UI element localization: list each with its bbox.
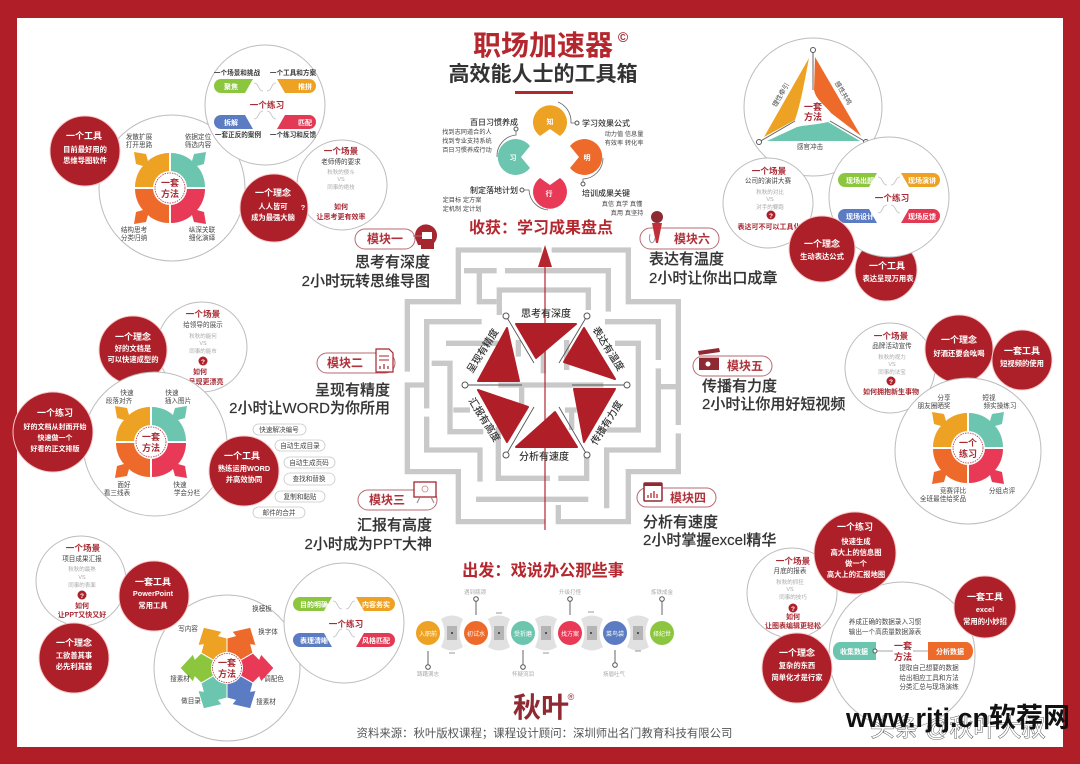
text: 培训成果关键: 培训成果关键 [582,188,630,198]
method circle 2: 段落对齐 [106,396,133,405]
exercise circle 5 [895,378,1041,524]
icon: 行 pacman: 行 [546,189,552,198]
scene circle 2: 呈现更漂亮 [188,377,224,386]
panel: journey chain [416,588,674,678]
method circle 4: 给出相应工具和方法 [899,673,959,682]
method circle 3 [154,595,300,741]
method circle 4: 方法 [894,651,912,662]
icon: document [376,349,393,372]
method circle 1: 依据定位 [185,132,212,141]
method circle 2: 快速 [120,388,134,397]
text: 培训成果关键: 真用 真坚持 [611,209,643,217]
chart: six module triangles [462,307,630,463]
stage nodes: 初试水 [467,630,485,638]
exercise circle 5: 全班最佳给奖品 [920,494,966,503]
scene circle 4: VS [786,587,794,593]
scene circle 4: 一个场景 [776,555,811,566]
concept bubble 5: 好酒还要会吆喝 [933,349,985,358]
method circle 3: 换模板 [252,604,272,613]
scene circle 2 [157,302,247,392]
exercise circle 5: 分组点评 [989,486,1016,495]
method circle 6: 感性共鸣 [833,79,854,107]
method circle 4: 输出一个高质量数据源表 [849,627,922,636]
module 3 heading [304,482,437,553]
method circle 3: 一套 [218,657,236,668]
tool bubble 2: 并高效协同 [226,475,262,484]
method circle 4: 提取自己想要的数据 [899,663,959,672]
concept bubble 1: ? [301,203,306,212]
scene circle 3: 项目成果汇报 [62,554,102,563]
labels: 传播有力度 [588,398,625,447]
panel: module 1 tools [50,45,387,261]
method circle 2: 方法 [142,442,160,453]
exercise circle 6 [829,137,949,257]
scene circle 6: 公司的演讲大赛 [745,176,791,185]
exercise circle 6: 现场设计 [846,212,874,221]
scene circle 4: 如何 [786,612,800,621]
module 6 heading: 2小时让你出口成章 [649,269,777,287]
tool bubble 2: 一个工具 [224,451,260,461]
text: 制定落地计划: 定目标 定方案 [443,196,482,204]
tool bubble 2: 熟练运用WORD [218,464,270,473]
module 4 heading: 模块四 [670,490,706,505]
scene circle 6: ? [769,213,773,220]
stage nodes: 入职前 [419,630,437,638]
scene circle 2: VS [199,341,207,347]
concept bubble 3 [39,623,109,693]
stage callouts: 踌躇满志 [417,670,439,678]
stage nodes: 菜鸟袋 [606,630,624,638]
exercise circle 1: 一个练习 [250,99,284,110]
scene circle 3: VS [78,575,86,581]
heading: departure: 出发：戏说办公那些事 [462,561,624,580]
scene circle 4: 同事的技巧 [779,593,807,601]
WORD skill pills: 快速解决编号 [259,425,299,434]
method circle 6: 一套 [804,101,822,112]
title: © [618,29,629,45]
scene circle 6: 秋秋的对比 [756,188,784,196]
exercise circle 6: 一个练习 [875,192,909,203]
exercise bubble 2: 好看的正文排版 [30,444,80,453]
module 4 heading: 2小时掌握excel精华 [643,532,776,549]
exercise circle 3: 一个练习 [329,618,363,629]
icon: 习 pacman: 习 [510,154,516,162]
text: 培训成果关键: 真信 真学 真懂 [602,200,642,208]
exercise bubble 2: 好的文档从封面开始 [24,422,86,431]
WORD skill pills: 查找和替换 [293,474,326,483]
title: 高效能人士的工具箱 [448,62,638,86]
method circle 1 [99,115,245,261]
exercise circle 1: 一个练习和反馈 [270,130,316,139]
method circle 1: 结构思考 [121,225,148,234]
tool bubble 5: 一套工具 [1004,345,1040,356]
exercise circle 6: 现场出题 [846,176,874,185]
module 2 heading [229,349,395,417]
icon: 明 pacman [570,139,602,175]
tool bubble 1: 思维导图软件 [63,156,108,165]
tool bubble 5 [992,330,1052,390]
exercise circle 5: 频实操练习 [984,401,1016,410]
scene circle 4: ? [791,606,795,613]
scene circle 3: 秋秋的最熟 [68,565,96,573]
source line: 资料来源：秋叶版权课程；课程设计顾问：深圳师出名门教育科技有限公司 [357,726,732,740]
concept bubble 4: 简单化才是行家 [771,673,823,682]
icon: 行 pacman [533,178,567,209]
icon: 知 pacman: 知 [546,117,554,126]
stage callouts: 炼铁成金 [651,588,673,596]
title: 职场加速器 [473,30,613,61]
panel: module 5 tools [845,315,1052,524]
scene circle 3: 如何 [75,601,89,610]
exercise circle 5: 练习 [959,448,977,459]
scene circle 6 [723,158,813,248]
labels: 表达有温度 [590,324,627,373]
method circle 4: 分析数据 [936,647,964,656]
concept bubble 2: 一个理念 [115,331,151,342]
module 1 heading [302,224,437,290]
concept bubble 3: 必先利其器 [56,662,93,671]
labels: 分析有速度 [519,450,569,463]
method circle 2 [83,372,227,516]
stage nodes: 受折磨 [514,630,532,638]
exercise circle 1: 一个工具和方案 [270,68,316,77]
module 1 heading: 思考有深度 [355,254,430,271]
exercise bubble 2: 一个练习 [37,407,73,418]
method circle 1: 细化演绎 [189,233,216,242]
stage callouts: 怀疑流泪 [512,670,534,678]
scene circle 4: 秋秋的抓狂 [776,578,804,586]
maze [407,250,678,522]
exercise circle 3: 风格匹配 [362,636,390,645]
method circle 2: 快速 [173,480,187,489]
concept bubble 3: 一个理念 [56,637,92,648]
exercise bubble 4: 快速生成 [841,537,871,546]
method circle 2: 看三线表 [104,488,131,497]
method circle 1: 纵深关联 [189,225,216,234]
text: 百日习惯养成: 百日习惯养成 [470,117,518,127]
exercise bubble 2 [13,392,93,472]
module 2 heading: 模块二 [327,355,363,370]
concept bubble 5 [925,315,993,383]
icon: clapperboard [698,348,720,370]
tool bubble 4: 一套工具 [967,591,1003,602]
tool bubble 3: PowerPoint [133,589,174,598]
module 4 heading [637,483,776,549]
module 4 heading: 分析有速度 [643,514,718,531]
exercise circle 3: 目的明确 [300,600,328,609]
scene circle 2: 同事的能市 [189,347,217,355]
method circle 3: 做目录 [181,696,201,705]
scene circle 6: 一个场景 [752,165,787,176]
scene circle 3 [36,536,126,626]
module 6 heading: 表达有温度 [649,251,724,268]
method circle 1: 打开思路 [126,140,153,149]
text: 百日习惯养成: 找到志同道合的人 [442,128,492,136]
stage callouts [417,588,673,678]
text: 制定落地计划: 定机制 定计划 [443,205,481,213]
exercise bubble 4: 高大上的信息图 [830,548,882,557]
method circle 3: 方法 [218,668,236,679]
icon: 习 pacman [498,139,530,175]
method circle 2: 插入图片 [165,396,191,405]
scene circle 1: 让思考更有效率 [316,212,366,221]
scene circle 5: 品牌活动宣传 [872,341,912,350]
module 1 heading: 模块一 [367,231,403,246]
concept bubble 6: 一个理念 [804,238,840,249]
exercise bubble 4 [814,512,896,594]
panel: module 3 tools [36,536,404,741]
exercise circle 1 [205,45,325,165]
concept bubble 4 [762,633,832,703]
concept bubble 1: 成为最强大脑 [251,213,295,222]
scene circle 2: 如何 [193,367,207,376]
method circle 3: 搜素材 [170,674,190,683]
stage callouts: 扬眉吐气 [603,670,625,678]
arrow: growth path [538,245,552,530]
module 5 heading: 模块五 [727,358,763,373]
scene circle 5: ? [889,379,893,386]
scene circle 1: 同事的绝技 [327,183,355,191]
scene circle 2: ? [201,359,205,366]
tool bubble 1: 目前最好用的 [63,145,107,154]
tool bubble 3 [119,561,189,631]
heading: harvest: 收获：学习成果盘点 [469,218,613,237]
tool bubble 4: excel [976,605,994,614]
module 3 heading: 模块三 [369,492,405,507]
scene circle 4: 让图表编辑更轻松 [765,621,821,630]
module 1 heading: 2小时玩转思维导图 [302,273,430,290]
tool bubble 1 [50,116,120,186]
concept bubble 3: 工欲善其事 [56,651,93,660]
method circle 4: 养成正确的数据录入习惯 [849,617,922,626]
icon: 明 pacman: 明 [584,154,590,162]
panel: module 6 tools [723,38,949,301]
method circle 6 [744,38,882,176]
labels: 思考有深度 [521,307,571,320]
text: 制定落地计划: 制定落地计划 [470,185,518,195]
scene circle 3: 同事的表面 [68,581,96,589]
panel: learning cycle [442,102,643,217]
method circle 3: 调配色 [264,674,284,683]
exercise bubble 4: 高大上的汇报地图 [827,570,885,579]
icon: bar chart window [644,483,662,501]
icon: projector board [414,482,436,503]
concept bubble 2: 好的文档是 [115,344,152,353]
text: 学习效果公式: 动力值 信息量 [605,130,643,138]
method circle 2: 面好 [117,480,131,489]
concept bubble 6: 生动表达公式 [800,252,845,261]
exercise bubble 4: 做一个 [845,559,868,568]
scene circle 3: 让PPT又快又好 [58,610,106,619]
scene circle 2: 秋秋的能何 [189,332,217,340]
module 2 heading: 2小时让WORD为你所用 [229,400,390,417]
scene circle 2: 一个场景 [186,308,221,319]
exercise circle 6: 现场演讲 [908,176,936,185]
exercise circle 1: 一个场景和挑战 [214,68,260,77]
scene circle 6: VS [766,197,774,203]
WORD skill pills [253,424,335,518]
module 6 heading: 模块六 [674,231,710,246]
scene circle 5: VS [888,362,896,368]
text: 培训成果关键 [582,188,643,217]
concept bubble 1: 一个理念 [255,187,291,198]
exercise circle 5: 分享 [937,393,951,402]
exercise circle 1: 一套正反的案例 [215,130,261,139]
connector arcs [497,102,603,210]
concept bubble 5: 一个理念 [941,334,977,345]
scene circle 3: 一个场景 [66,542,101,553]
tool bubble 5: 短视频的使用 [1000,359,1044,368]
exercise circle 5: 短视 [982,393,996,402]
exercise circle 3: 表理清晰 [300,636,328,645]
scene circle 4 [747,548,837,638]
panel: module 2 tools [13,302,335,518]
tool bubble 4 [954,576,1016,638]
stage callouts: 遇到瓶颈 [464,588,486,596]
watermark: 头条 @秋叶大叔 [870,715,1046,742]
concept bubble 2: 可以快速成型的 [107,355,159,364]
scene circle 1: 一个场景 [324,145,359,156]
method circle 6: 感官冲击 [797,142,824,151]
logo: 秋叶 [513,692,569,723]
method circle 2: 学会分栏 [174,488,201,497]
exercise circle 1: 聚焦 [224,82,238,91]
tool bubble 3: 一套工具 [135,576,171,587]
scene circle 5: 如何拥抱新生事物 [863,387,919,396]
concept bubble 1 [240,174,308,242]
icon: 知 pacman [533,105,567,136]
method circle 1: 分类归纳 [121,233,148,242]
module 5 heading: 传播有力度 [702,378,777,395]
method circle 1: 方法 [161,188,179,199]
method circle 3: 写内容 [178,624,198,633]
text: 学习效果公式 [582,118,643,147]
scene circle 1 [297,140,387,230]
method circle 6: 方法 [804,111,822,122]
exercise circle 3: 内容务实 [362,600,390,609]
module 5 heading: 2小时让你用好短视频 [702,396,845,413]
stage nodes: 找方案 [561,630,579,638]
tool bubble 1: 一个工具 [66,131,102,141]
tool bubble 4: 常用的小妙招 [963,617,1007,626]
text: 百日习惯养成: 百日习惯养成行动 [442,146,492,154]
method circle 4 [829,582,975,728]
title [448,29,638,94]
scene circle 6: 表达可不可以工具化 [738,222,800,231]
scene circle 5: 秋秋的视力 [878,353,906,361]
scene circle 4: 月底的报表 [774,566,807,575]
method circle 4: 收集数据 [840,647,868,656]
text: 百日习惯养成: 找到专业支持系统 [442,137,492,145]
scene circle 5: 一个场景 [874,330,909,341]
exercise bubble 4: 一个练习 [837,521,873,532]
scene circle 1: 老师傅的要求 [321,157,361,166]
method circle 4: 分类汇总与现场演练 [899,682,959,691]
tool bubble 6: 一个工具 [869,261,905,271]
exercise circle 5: 朋友圈晒奖 [918,401,951,410]
tool bubble 3: 常用工具 [138,601,168,610]
scene circle 5: 同事的法宝 [878,368,906,376]
method circle 1: 筛选内容 [185,140,212,149]
module 3 heading: 汇报有高度 [357,517,432,534]
method circle 3: 搜素材 [256,697,276,706]
module 5 heading [693,348,845,413]
exercise circle 1: 拆解 [224,118,238,127]
exercise circle 5: 一个 [959,438,977,448]
exercise bubble 2: 快速做一个 [38,433,72,442]
exercise circle 6: 现场反馈 [908,212,936,221]
scene circle 1: 秋秋的傻斗 [327,168,355,176]
method circle 1: 一套 [161,177,179,188]
WORD skill pills: 邮件的合并 [263,508,296,517]
concept bubble 2 [99,316,167,384]
WORD skill pills: 复制和黏贴 [284,492,317,501]
module 2 heading: 呈现有精度 [315,382,390,399]
concept bubble 1: 人人皆可 [258,202,288,211]
method circle 1: 发散扩展 [126,132,153,141]
WORD skill pills: 自动生成目录 [280,441,320,450]
scene circle 1: 如何 [334,202,348,211]
scene circle 6: 对手的要跑 [756,203,784,211]
icon: head with lock [413,224,437,249]
concept bubble 4: 复杂的东西 [779,661,815,670]
labels: 呈现有精度 [464,326,501,375]
method circle 2: 快速 [165,388,179,397]
exercise circle 1: 匹配 [298,119,312,127]
module 6 heading [640,211,777,287]
method circle 2: 一套 [142,431,160,442]
tool bubble 6: 表达呈现万用表 [862,274,914,283]
icon: microphone [650,211,663,243]
method circle 4: 一套 [894,640,912,651]
labels: 汇报有高度 [466,395,503,444]
watermark: www.rjtj.cn软荐网 [845,703,1070,733]
stage nodes: 择纪世 [653,630,671,638]
scene circle 2: 给领导的展示 [183,320,223,329]
bow-tie connectors [441,612,649,653]
text: 百日习惯养成 [442,117,518,154]
exercise circle 3 [284,563,404,683]
scene circle 3: ? [80,593,84,600]
stage nodes [416,621,674,645]
scene circle 1: VS [337,177,345,183]
method circle 3: 换字体 [258,627,278,636]
logo: ® [568,692,575,702]
scene circle 5 [845,323,935,413]
exercise circle 1: 推拼 [298,82,312,91]
module 3 heading: 2小时成为PPT大神 [304,536,432,553]
text: 学习效果公式: 有效率 转化率 [605,139,643,147]
stage callouts: 升级打怪 [559,588,581,596]
concept bubble 6 [789,216,855,282]
text: 学习效果公式: 学习效果公式 [582,118,630,128]
tool bubble 2 [209,436,279,506]
concept bubble 4: 一个理念 [779,647,815,658]
WORD skill pills: 自动生成页码 [289,458,329,467]
text: 制定落地计划 [443,185,518,213]
panel: module 4 tools [747,512,1016,728]
tool bubble 6 [855,239,917,301]
method circle 6: 理性牵引 [770,81,791,108]
exercise circle 5: 竞赛评比 [940,486,967,495]
labels [464,307,627,463]
